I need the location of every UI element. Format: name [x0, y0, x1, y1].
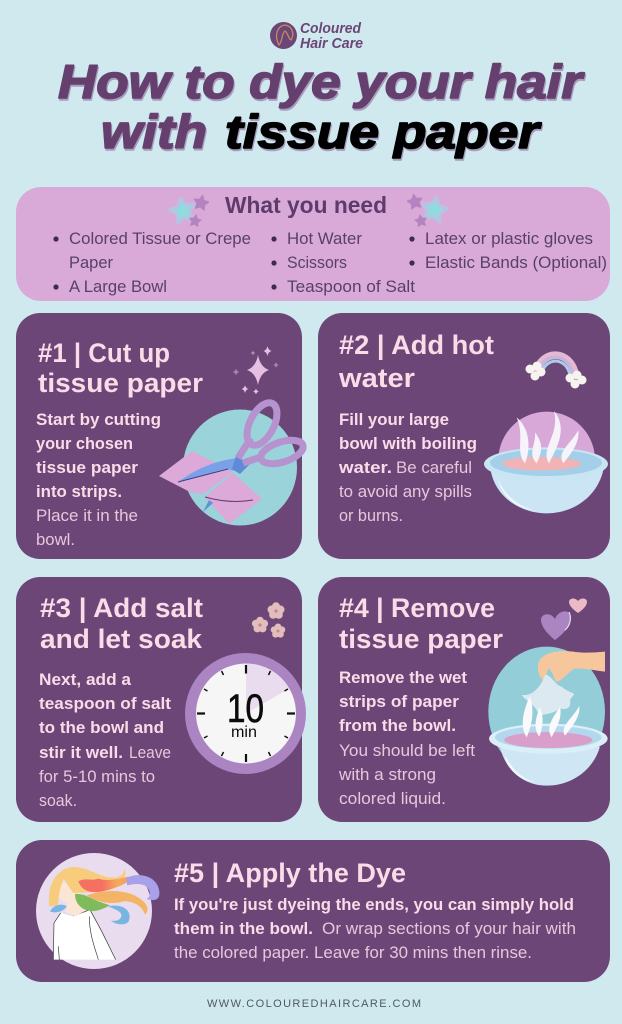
icon: rainbow [526, 354, 586, 388]
text: step 3: teaspoon of salt [39, 695, 172, 713]
panel: step 4 [318, 577, 610, 822]
list column 3 [409, 229, 607, 272]
heading: step 4: #4 | Remove [339, 593, 495, 623]
text: step 1: your chosen [36, 435, 133, 453]
list column 2: Hot Water [287, 229, 362, 248]
text: step 1 [36, 411, 161, 549]
icon: flowers [252, 602, 285, 638]
heading: step 3 [40, 593, 203, 654]
logo: Coloured [300, 21, 362, 37]
logo: Hair Care [300, 36, 363, 52]
text: step 4: You should be left [339, 742, 475, 760]
text: step 1: tissue paper [36, 459, 139, 477]
text: step 2: Be careful [396, 459, 472, 477]
panel: step 2 [318, 313, 610, 559]
heading: what you need: What you need [225, 192, 387, 218]
heading: step 3: and let soak [40, 624, 203, 654]
list column 2: Teaspoon of Salt [287, 277, 415, 296]
heading: step 5: #5 | Apply the Dye [174, 858, 406, 888]
text: step 3: Next, add a [39, 671, 132, 689]
text: step 5: them in the bowl. [174, 920, 313, 938]
text: step 4: strips of paper [339, 693, 460, 711]
text: step 2: Fill your large [339, 411, 449, 429]
text: step 2: water. [338, 459, 392, 477]
text: step 1: Place it in the [36, 507, 138, 525]
icon: timer: 10 [227, 687, 264, 731]
title: How to dye your hair [58, 55, 585, 108]
logo [270, 21, 363, 52]
panel: step 1 [16, 313, 306, 559]
panel: step 5 [16, 840, 610, 982]
panel: what you need [16, 187, 610, 301]
heading: step 1 [38, 338, 204, 398]
panel: step 3 [16, 577, 306, 822]
heading: step 1: #1 | Cut up [38, 338, 170, 368]
text: step 1: into strips. [36, 483, 122, 501]
list column 2 [271, 229, 415, 296]
title: tissue paper [225, 105, 542, 158]
title: with [101, 105, 207, 158]
heading: step 1: tissue paper [38, 368, 204, 398]
text: step 4: from the bowl. [339, 717, 456, 735]
list column 3: Latex or plastic gloves [425, 229, 593, 248]
heading: step 2: water [338, 363, 416, 393]
list column 1: Paper [69, 253, 113, 272]
icon: stars left [168, 194, 210, 227]
text: step 4: with a strong [338, 766, 436, 784]
icon: hearts [541, 598, 587, 640]
heading: step 2: #2 | Add hot [339, 330, 494, 360]
icon: stars right [406, 193, 449, 227]
heading: step 3: #3 | Add salt [40, 593, 203, 623]
text: step 5: Or wrap sections of your hair with [322, 920, 576, 938]
icon: sparkles [232, 346, 279, 394]
text: step 2: to avoid any spills [339, 483, 472, 501]
text: step 4 [338, 669, 475, 808]
icon: bowl, hand and tissue [488, 647, 608, 786]
icon: timer [185, 653, 306, 774]
list column 1: A Large Bowl [69, 277, 167, 296]
text: step 5: If you're just dyeing the ends, you can simply hold [174, 896, 574, 914]
text: step 3: for 5-10 mins to [39, 768, 155, 786]
list column 1 [53, 229, 251, 296]
heading: step 2 [338, 330, 494, 393]
icon: scissors and paper [159, 398, 306, 526]
text: step 1: bowl. [36, 531, 75, 549]
list column 1: Colored Tissue or Crepe [69, 229, 251, 248]
text: step 4: colored liquid. [339, 790, 446, 808]
text: step 4: Remove the wet [339, 669, 468, 687]
icon: woman with rainbow hair [36, 853, 159, 969]
list column 3: Elastic Bands (Optional) [425, 253, 607, 272]
text: step 3: to the bowl and [39, 719, 164, 737]
text: step 2 [338, 411, 477, 525]
text: step 3: Leave [129, 744, 171, 762]
icon: bowl of steaming water [484, 411, 608, 513]
text: step 3: stir it well. [39, 744, 123, 762]
text: step 5 [174, 896, 576, 962]
text: step 2: bowl with boiling [339, 435, 477, 453]
icon: timer: min [231, 724, 257, 741]
footer url: WWW.COLOUREDHAIRCARE.COM [207, 998, 421, 1010]
text: step 1: Start by cutting [36, 411, 161, 429]
title [58, 55, 585, 158]
text: step 3: soak. [39, 792, 77, 810]
text: step 2: or burns. [339, 507, 403, 525]
text: step 3 [39, 671, 172, 810]
list column 2: Scissors [287, 253, 347, 272]
heading: step 4 [339, 593, 504, 654]
heading: step 4: tissue paper [339, 624, 504, 654]
text: step 5: the colored paper. Leave for 30 mins then rinse. [174, 944, 532, 962]
